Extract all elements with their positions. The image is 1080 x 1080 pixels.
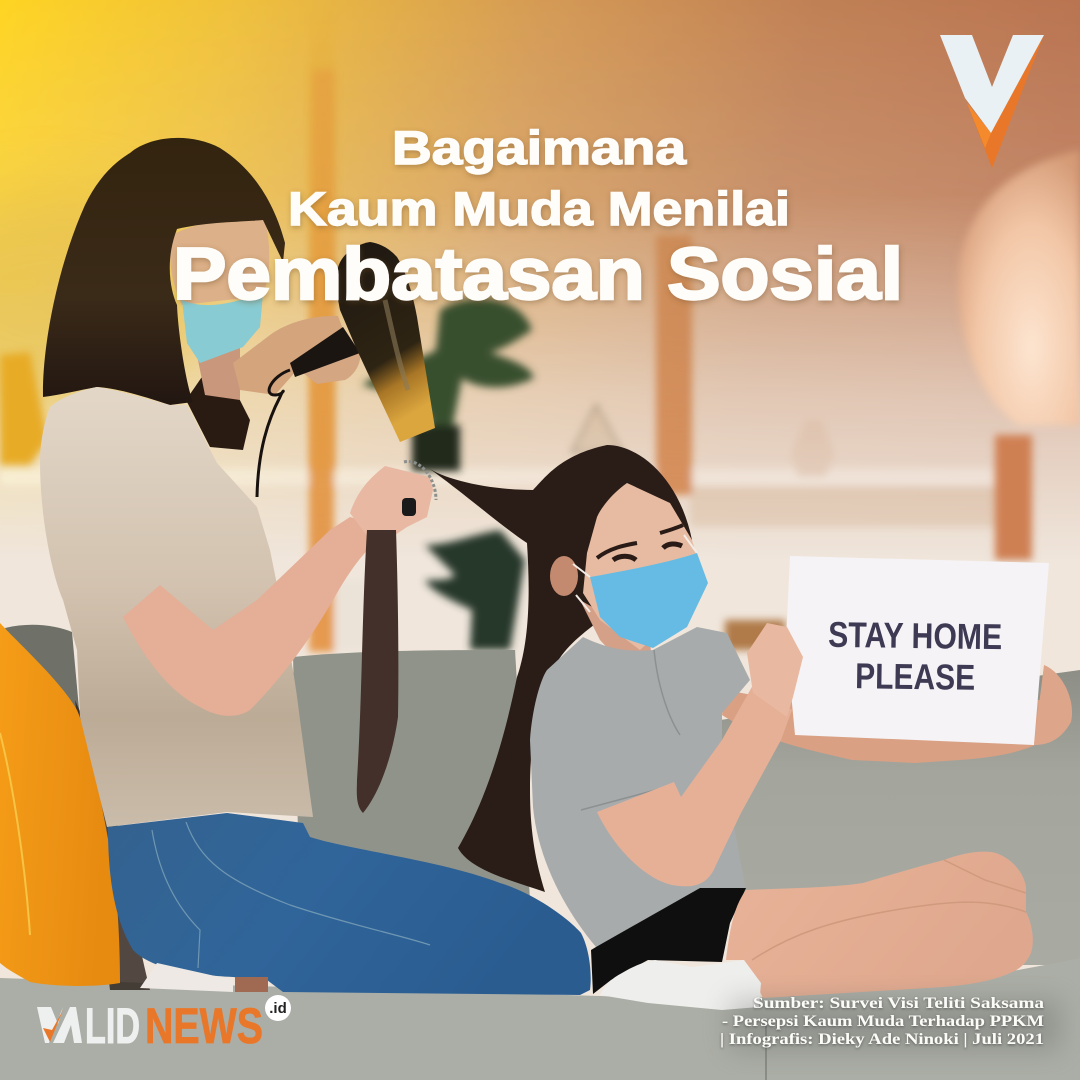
girl hand right (1034, 665, 1072, 745)
logo small v accent (43, 1010, 63, 1042)
background: foreground room objects (0, 70, 1080, 650)
woman neck (195, 345, 240, 400)
sofa seat seam (765, 1020, 767, 1080)
sign (747, 556, 1072, 745)
books on shelf (0, 352, 48, 465)
sign text: PLEASE (855, 655, 975, 698)
logo: V mark (940, 35, 1044, 168)
girl eyes and brows (597, 525, 683, 560)
dryer cord (257, 370, 290, 497)
woman jeans (108, 813, 591, 995)
title line 1: Bagaimana (392, 121, 687, 174)
source credit: Sumber: Survei Visi Teliti Saksama (753, 995, 1044, 1012)
girl shorts (591, 888, 746, 994)
pillow piping (0, 733, 30, 935)
lamp shade (958, 150, 1080, 425)
orange pillow (0, 623, 150, 990)
hair strand hanging (357, 530, 398, 813)
logo: Valid News (37, 995, 291, 1054)
sofa middle back cushion (293, 650, 530, 900)
title line 3: Pembatasan Sosial (173, 234, 903, 315)
woman foot (235, 977, 268, 992)
woman face (170, 218, 269, 305)
girl hair (427, 445, 692, 892)
dryer body (337, 242, 435, 442)
vase (790, 420, 835, 476)
sofa seat (0, 958, 1080, 1080)
background: warm colour overlay (0, 0, 1080, 560)
woman lower arm (123, 517, 395, 716)
sofa right back cushion (720, 670, 1080, 965)
girl legs (726, 852, 1033, 998)
frame beside post (335, 580, 385, 650)
logo letter A (53, 1007, 82, 1043)
title (173, 121, 903, 315)
leafy plant lower (425, 530, 525, 650)
background: room furniture (0, 0, 1018, 652)
girl ear (550, 556, 578, 596)
hair dryer (257, 242, 435, 497)
girl (427, 445, 1040, 1010)
girl shirt (530, 627, 750, 947)
small pyramid (572, 405, 622, 452)
dryer handle (290, 327, 360, 377)
woman (40, 138, 591, 995)
shelf shadow (690, 487, 1010, 527)
background: left yellow haze (0, 190, 200, 410)
rings (404, 461, 436, 500)
sign board (786, 556, 1049, 745)
logo .id badge (265, 995, 291, 1021)
plant pot (412, 425, 460, 471)
woman back hair strands (186, 355, 250, 450)
sofa (0, 625, 1080, 1080)
comb handle (402, 498, 416, 516)
sofa left back (5, 625, 80, 720)
leafy plant upper (362, 298, 534, 430)
girl shirt sleeve fold (581, 650, 680, 810)
pillow body (0, 623, 120, 986)
girl face (583, 483, 698, 650)
girl neck (580, 600, 655, 700)
woman shirt (40, 387, 313, 827)
wooden post left (309, 0, 334, 652)
woman lower palm (297, 352, 360, 384)
girl leg crease (752, 860, 1026, 960)
girl hand on sign (747, 623, 803, 717)
wooden post middle (656, 235, 692, 495)
logo word NEWS: NEWS (145, 998, 263, 1054)
box behind sign (725, 620, 785, 650)
sign text (828, 614, 1002, 698)
woman raised forearm (233, 316, 345, 395)
woman mask (182, 293, 263, 363)
girl sock (600, 960, 761, 1010)
girl mask (590, 553, 708, 648)
pillow shadow (75, 700, 150, 990)
logo letter V (37, 1007, 63, 1043)
lamp base wood (995, 435, 1032, 560)
dryer highlight (385, 300, 408, 390)
source credit (720, 995, 1044, 1048)
shelf board (0, 468, 1018, 485)
title line 2: Kaum Muda Menilai (288, 182, 790, 235)
wooden post left tint (312, 70, 335, 470)
girl mask straps (573, 535, 697, 612)
logo .id badge: .id (269, 1000, 287, 1017)
logo word LID: LID (85, 998, 140, 1054)
source credit: - Persepsi Kaum Muda Terhadap PPKM (722, 1013, 1044, 1030)
woman hair (43, 138, 285, 405)
woman white cloth (140, 963, 233, 992)
woman hand holding hair (350, 466, 433, 540)
girl arm holding sign (597, 685, 792, 886)
source credit: | Infografis: Dieky Ade Ninoki | Juli 2021 (720, 1031, 1044, 1048)
footer shade behind credit (730, 1000, 1060, 1050)
upper shelf band (0, 270, 40, 292)
girl arm behind sign (722, 690, 1040, 763)
sign text: STAY HOME (828, 614, 1002, 657)
